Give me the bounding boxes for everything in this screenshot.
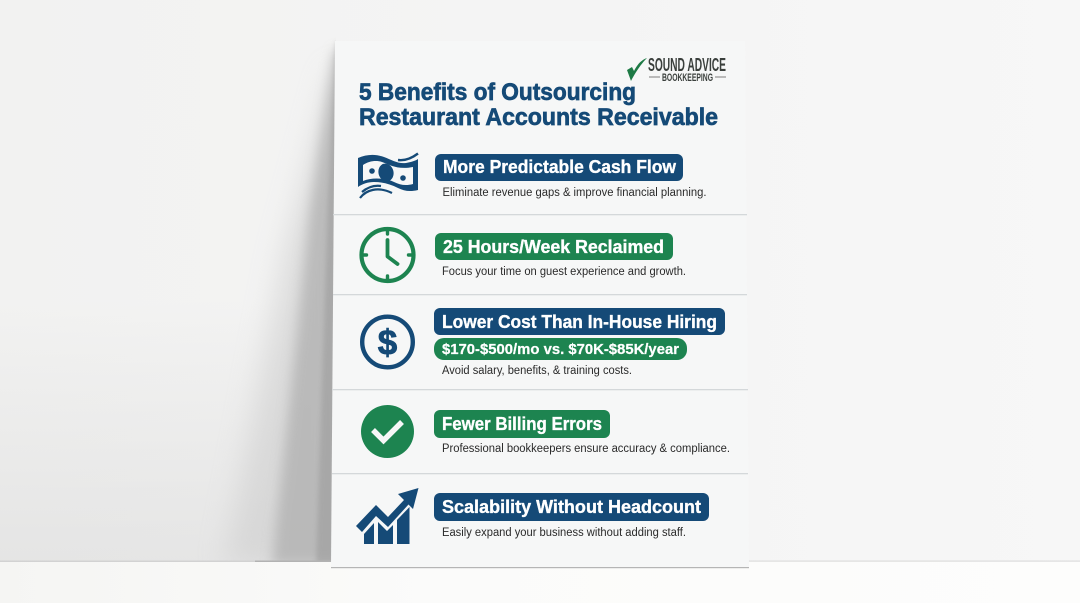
title bbox=[359, 79, 718, 131]
heading pill: Lower Cost Than In-House Hiring bbox=[442, 312, 717, 332]
row 3: lower cost bbox=[362, 308, 725, 377]
logo: Sound Advice Bookkeeping bbox=[627, 55, 726, 84]
title: 5 Benefits of Outsourcing bbox=[359, 79, 636, 106]
description: Easily expand your business without adding staff. bbox=[442, 527, 686, 539]
heading pill: Scalability Without Headcount bbox=[442, 497, 701, 517]
row 2: hours reclaimed bbox=[362, 229, 686, 281]
icon: dollar coin bbox=[362, 317, 413, 367]
icon: clock bbox=[362, 229, 414, 281]
icon: dollar coin: $ bbox=[378, 324, 397, 362]
row 4: billing errors bbox=[361, 405, 730, 458]
row 5: scalability bbox=[356, 488, 709, 544]
heading pill bbox=[435, 233, 673, 260]
heading pill: 25 Hours/Week Reclaimed bbox=[443, 237, 664, 257]
description: Focus your time on guest experience and growth. bbox=[442, 266, 686, 278]
logo: Sound Advice Bookkeeping: SOUND ADVICE bbox=[648, 55, 726, 75]
row 1: cash flow bbox=[358, 154, 706, 199]
description: Eliminate revenue gaps & improve financial planning. bbox=[442, 187, 706, 199]
floor bbox=[0, 560, 1080, 603]
description: Professional bookkeepers ensure accuracy & compliance. bbox=[442, 443, 730, 455]
description: Avoid salary, benefits, & training costs. bbox=[442, 365, 632, 377]
heading pill bbox=[434, 410, 610, 438]
heading pill: Fewer Billing Errors bbox=[442, 414, 602, 434]
icon: logo check mark bbox=[627, 58, 647, 81]
poster shadow on wall bbox=[231, 42, 335, 560]
icon: growth chart bbox=[356, 488, 418, 544]
price comparison pill: $170-$500/mo vs. $70K-$85K/year bbox=[442, 341, 679, 358]
poster sheet bbox=[331, 41, 749, 567]
heading pill: More Predictable Cash Flow bbox=[443, 157, 677, 177]
heading pill bbox=[434, 493, 709, 521]
logo: Sound Advice Bookkeeping: BOOKKEEPING bbox=[662, 72, 713, 84]
icon: check circle bbox=[361, 405, 414, 458]
icon: banknote bbox=[358, 154, 418, 198]
title: Restaurant Accounts Receivable bbox=[359, 104, 718, 131]
poster bbox=[331, 41, 749, 568]
